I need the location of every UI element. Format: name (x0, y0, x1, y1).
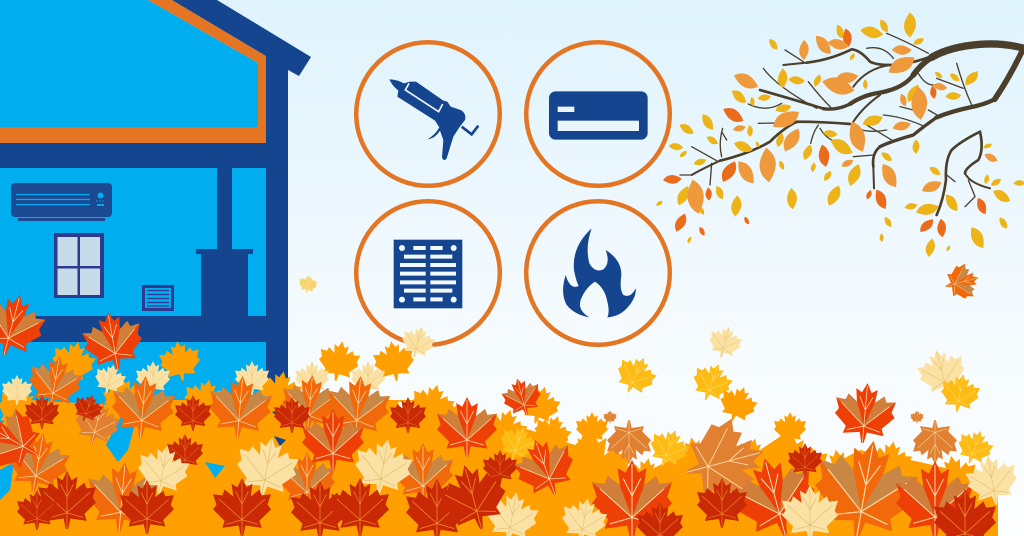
bright red-orange leaves (0, 397, 974, 536)
veined orange leaves (3, 352, 997, 535)
icon: flame in circle (526, 201, 670, 345)
attic interior (0, 0, 258, 127)
pale leaves (134, 432, 838, 536)
floor vent (144, 286, 172, 310)
roof and outer wall (172, 0, 311, 385)
orange mass of leaves (0, 400, 998, 536)
blue and sky gaps between leaves (0, 401, 702, 500)
branch limbs (680, 33, 1024, 215)
living floor interior (0, 168, 266, 316)
fallen leaf pile (0, 336, 998, 536)
furnace and chimney (196, 168, 253, 316)
floor band (0, 316, 266, 342)
drifting leaves (611, 350, 661, 400)
icon: vent grille in circle (356, 201, 500, 345)
small faded leaf (298, 274, 318, 294)
house cross-section (0, 0, 311, 462)
front dark red leaves (17, 465, 683, 536)
autumn tree branch (655, 12, 1024, 258)
wall air conditioner (11, 183, 112, 221)
falling leaf under branch (941, 261, 983, 303)
icon: air conditioner in circle (526, 42, 670, 186)
icon: caulking gun in circle (356, 42, 500, 186)
faded leaf on circle (398, 322, 438, 362)
red leaves at house edge (0, 287, 50, 363)
light orange leaves (685, 33, 999, 215)
dark red leaves (25, 390, 996, 536)
window (54, 233, 104, 298)
attic insulation outline (0, 0, 266, 143)
ceiling band (0, 143, 288, 168)
yellow leaves (655, 12, 1024, 258)
flat orange leaves (0, 341, 976, 486)
basement interior (0, 342, 266, 462)
red-orange leaves (663, 28, 989, 238)
leaves in the air (0, 274, 1021, 509)
